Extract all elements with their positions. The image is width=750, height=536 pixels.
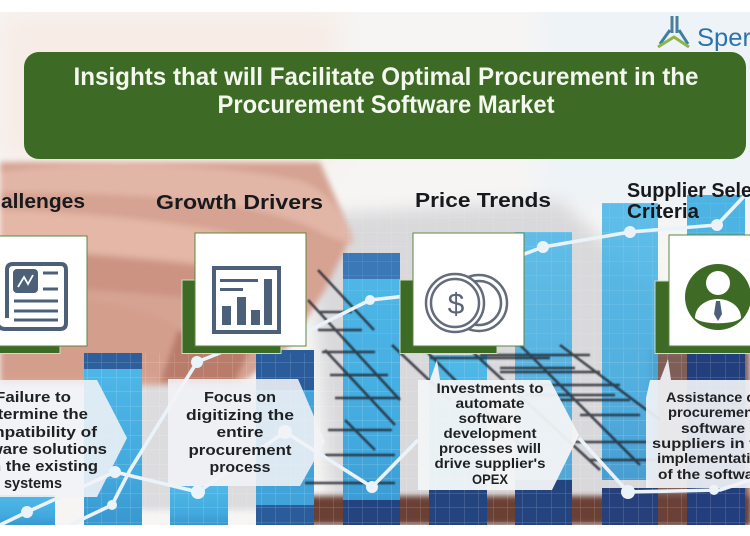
column: Challenges	[0, 191, 127, 497]
callout: price trend: OPEX	[472, 471, 509, 487]
keyboard base	[310, 200, 750, 510]
title banner	[24, 52, 746, 159]
heading: Price Trends: Price Trends	[415, 190, 551, 212]
icon: coins: $	[448, 288, 465, 321]
callout: price trend: processes will	[439, 440, 541, 456]
callout: growth driver	[168, 379, 325, 486]
callout: growth driver: Focus on	[204, 389, 276, 406]
callout: growth driver: digitizing the	[186, 407, 294, 424]
callout: price trend	[418, 360, 579, 490]
heading: Supplier Selection Criteria	[627, 180, 750, 223]
icon: bar chart report	[214, 268, 279, 332]
blue bars	[0, 195, 745, 525]
column: Price Trends	[400, 190, 579, 490]
wordmark: Sper	[697, 24, 750, 52]
callout: supplier selection: software	[681, 420, 745, 436]
logo: Spend Edge mark and cropped wordmark	[658, 16, 750, 52]
hand	[0, 162, 354, 385]
card shadow	[0, 280, 60, 354]
keyboard keys	[305, 270, 660, 483]
icon: coins	[426, 274, 507, 332]
heading: Supplier Selection Criteria: Criteria	[627, 201, 700, 223]
card shadow	[400, 280, 497, 354]
callout: price trend: drive supplier's	[434, 455, 546, 471]
heading: Growth Drivers: Growth Drivers	[156, 192, 323, 214]
title text: Insights that will Facilitate Optimal Procurement in the	[74, 63, 699, 91]
callout: supplier selection	[646, 359, 750, 488]
callout: growth driver: process	[210, 459, 270, 476]
callout: growth driver: entire	[216, 424, 264, 441]
callout: price trend: development	[444, 425, 537, 441]
title text	[74, 63, 699, 119]
lower dark band	[300, 496, 750, 525]
icon card	[195, 233, 306, 346]
callout: challenge: systems	[4, 475, 62, 492]
column: Supplier Selection Criteria	[627, 180, 750, 488]
callout: price trend: software	[458, 410, 522, 426]
title text: Procurement Software Market	[218, 91, 555, 119]
icon: newspaper	[0, 264, 66, 329]
icon: logo mark	[658, 16, 689, 47]
icon: person in circle	[685, 264, 750, 330]
callout: growth driver: procurement	[188, 442, 292, 459]
icon card	[413, 233, 524, 346]
icon card	[0, 236, 87, 346]
icon card	[669, 235, 750, 346]
card shadow	[182, 280, 281, 354]
card shadow	[655, 281, 750, 354]
callout: price trend: automate	[456, 395, 525, 411]
trend lines	[0, 190, 750, 525]
column: Growth Drivers	[156, 192, 325, 486]
callout: challenge	[0, 380, 127, 497]
callout: price trend: Investments to	[436, 380, 544, 396]
